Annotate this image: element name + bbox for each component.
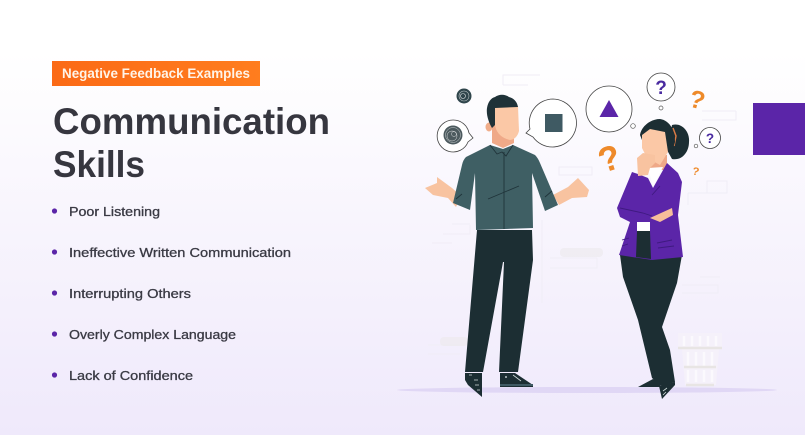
bullet list — [52, 204, 291, 383]
left shoe — [465, 373, 482, 397]
hair bun — [667, 124, 689, 159]
small scribble — [456, 88, 472, 104]
scribble speech bubble — [437, 120, 473, 152]
woman figure — [617, 119, 689, 399]
man figure — [425, 95, 589, 397]
question thought bubble: ? — [655, 78, 667, 99]
wastebasket — [678, 333, 722, 385]
bullet: ineffective written communication: Ineffective Written Communication — [69, 245, 291, 260]
jacket — [617, 163, 683, 260]
shirt details — [456, 145, 552, 229]
right shoe — [500, 373, 533, 387]
left shoe — [638, 379, 662, 387]
hand on chin — [637, 153, 655, 176]
face — [642, 129, 668, 165]
title: Skills — [53, 143, 145, 185]
neck — [492, 118, 514, 148]
face — [495, 106, 519, 140]
bullet: overly complex language: Overly Complex Language — [69, 327, 236, 342]
right hand — [553, 178, 589, 205]
right shoe — [659, 382, 675, 399]
title: Communication — [53, 100, 330, 142]
trousers — [620, 255, 682, 386]
hair band — [673, 128, 676, 146]
badge: negative feedback examples: Negative Feedback Examples — [62, 66, 250, 81]
orange question marks: ? — [691, 165, 700, 179]
triangle thought bubble — [586, 86, 635, 132]
forearm hand — [650, 208, 673, 222]
hair — [487, 95, 518, 128]
neck — [650, 155, 667, 170]
left hand — [425, 177, 461, 207]
orange question marks: ? — [686, 85, 708, 116]
shirt — [453, 145, 558, 230]
blouse hem — [637, 222, 650, 231]
orange question marks: ? — [593, 137, 626, 181]
ear — [486, 122, 492, 132]
bullet: lack of confidence: Lack of Confidence — [69, 368, 193, 383]
bullet: poor listening: Poor Listening — [69, 204, 160, 219]
faint smudges — [440, 248, 603, 346]
bullet: interrupting others: Interrupting Others — [69, 286, 192, 301]
purple block — [753, 103, 805, 155]
hair — [640, 119, 675, 152]
small question thought bubble: ? — [706, 131, 714, 146]
orange question marks — [593, 85, 708, 181]
waist gap — [636, 231, 651, 259]
badge: negative feedback examples — [52, 61, 260, 86]
square speech bubble — [526, 99, 576, 147]
floor shadow — [397, 387, 777, 393]
question thought bubble — [647, 73, 675, 110]
small question thought bubble — [694, 128, 720, 148]
trousers — [465, 230, 533, 372]
title — [53, 100, 330, 185]
white blouse — [648, 167, 663, 187]
jacket details — [620, 186, 674, 248]
